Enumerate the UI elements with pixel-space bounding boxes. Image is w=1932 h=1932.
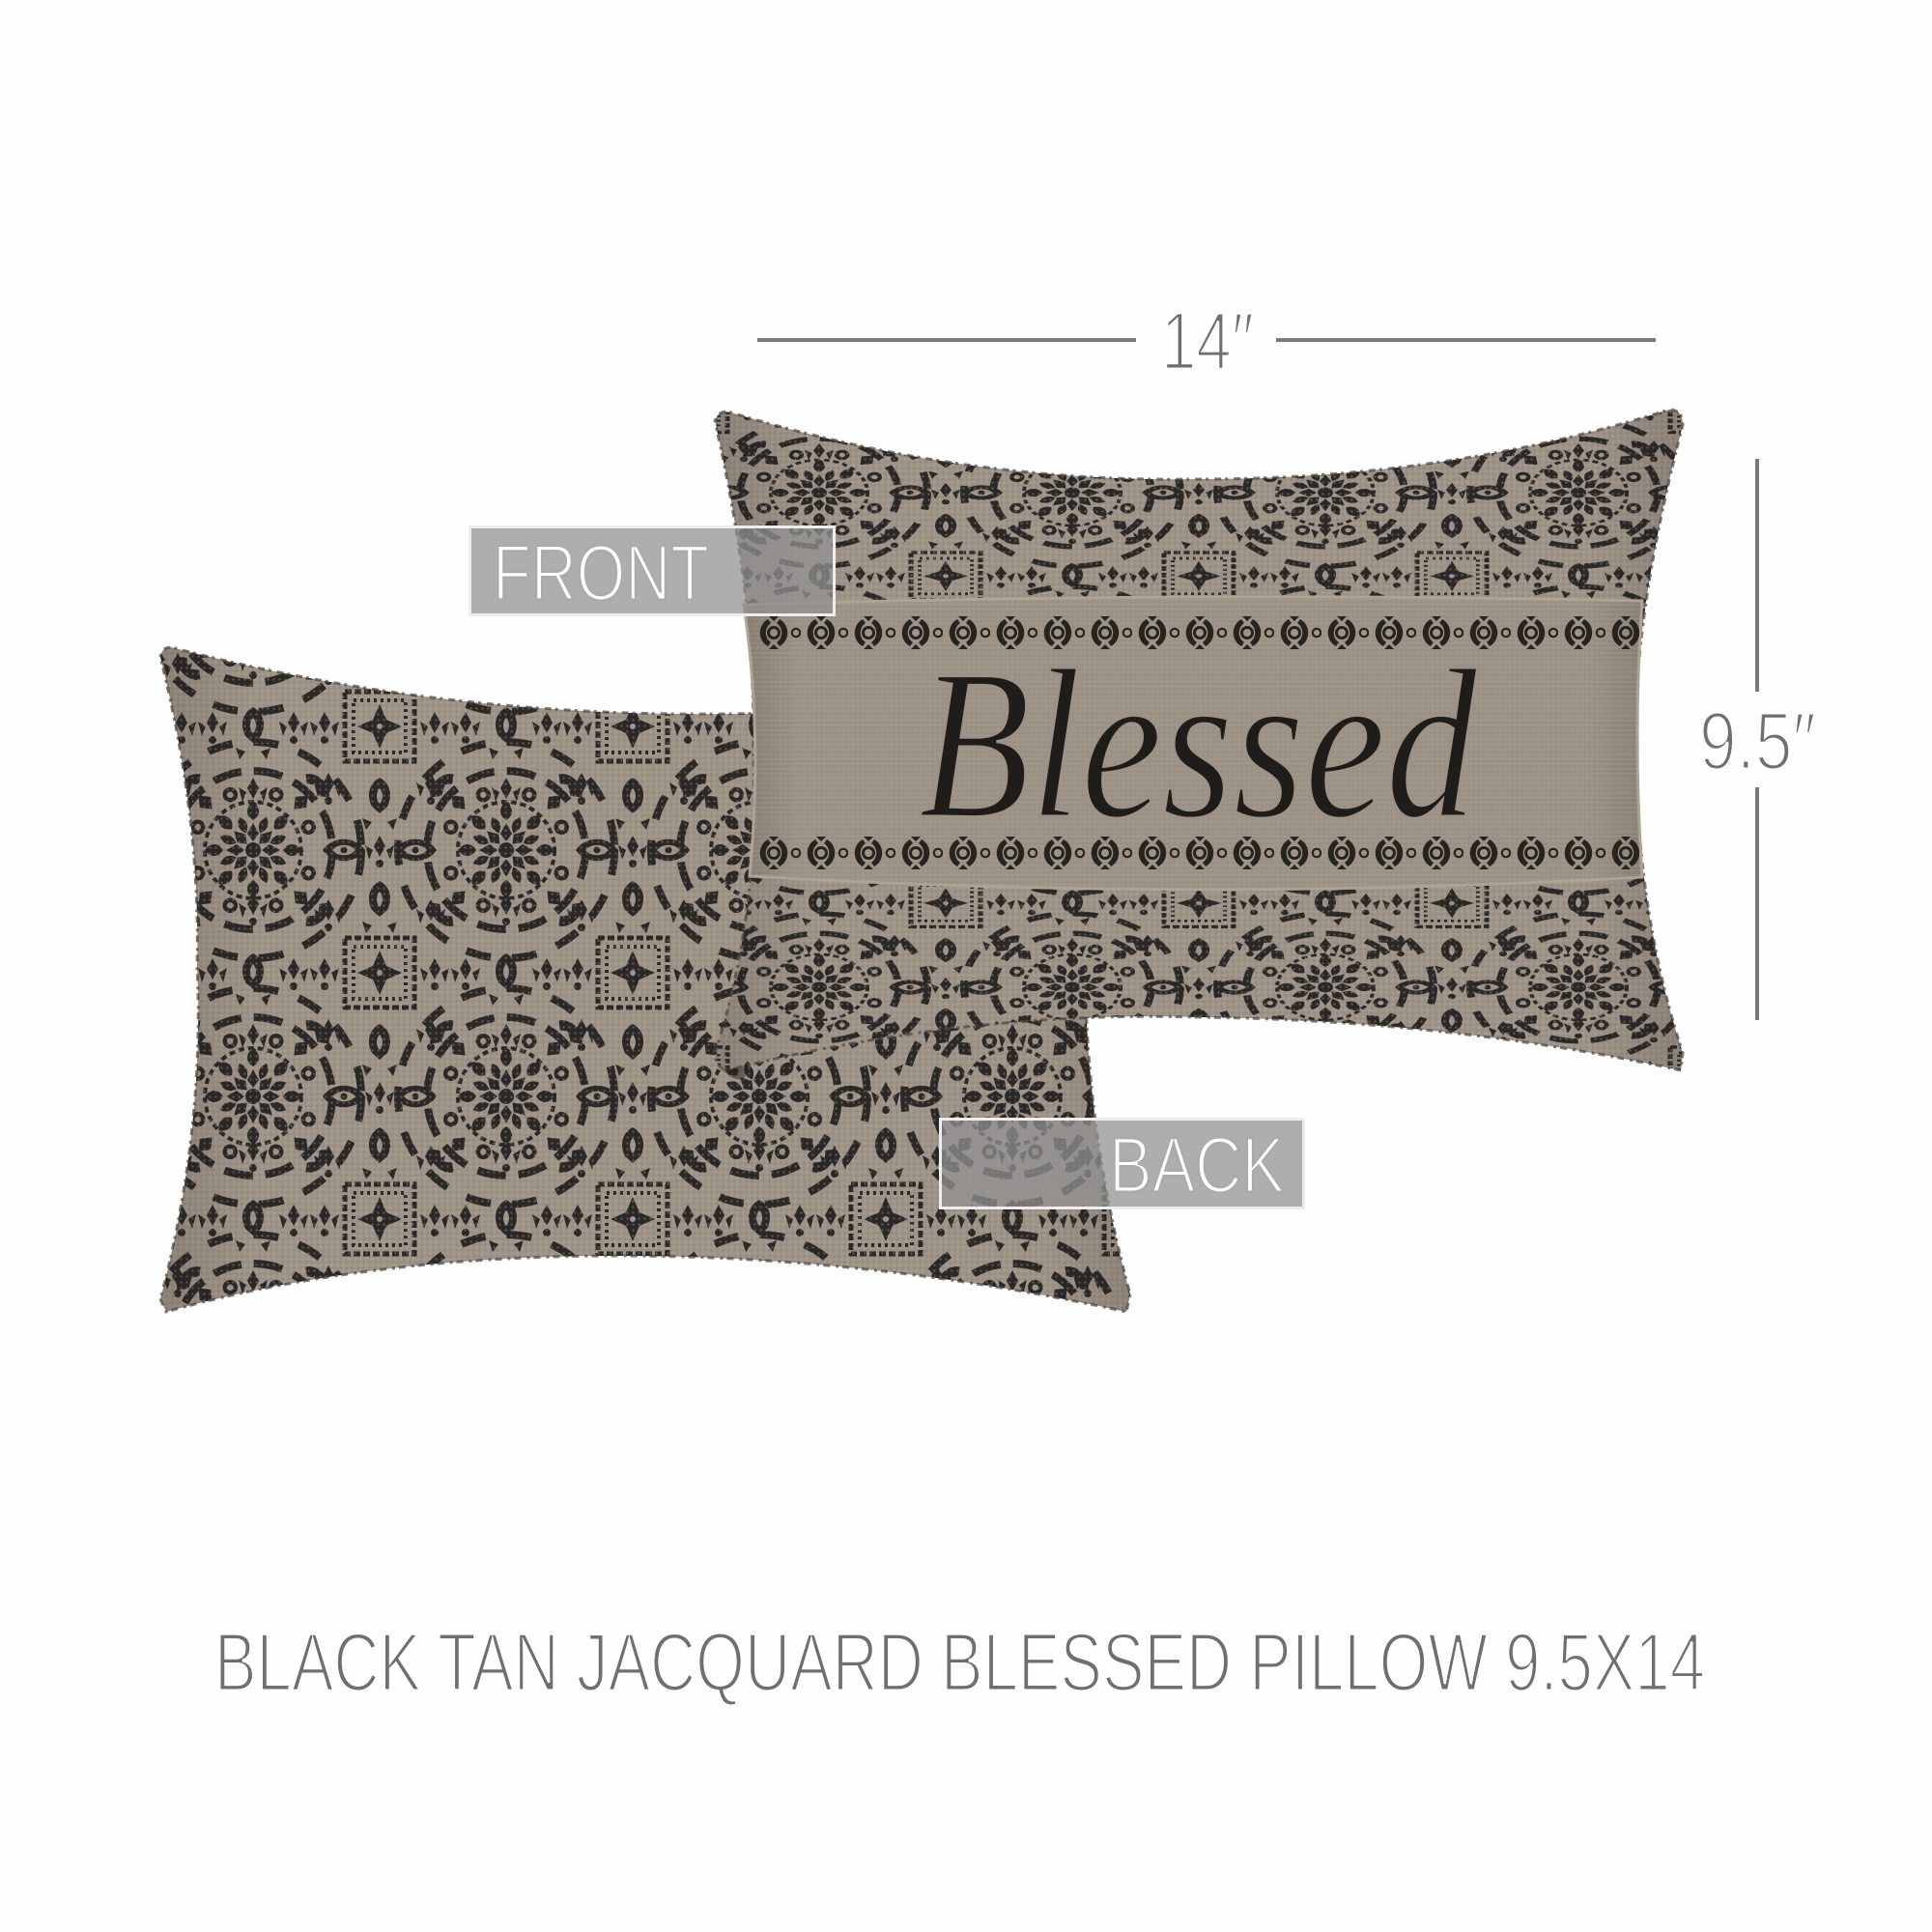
band word: Blessed [919, 626, 1478, 864]
front pillow lower fabric [710, 609, 1688, 1077]
front pillow [710, 406, 1688, 1080]
dimension: height 9.5 in: 9.5″ [1699, 696, 1816, 786]
front pillow upper fabric [710, 406, 1688, 613]
dimension: height 9.5 in [1699, 459, 1816, 1020]
label: BACK: BACK [1109, 1122, 1285, 1209]
band trim: upper [753, 616, 1639, 649]
dimension: width 14 in [757, 296, 1656, 386]
label: FRONT: FRONT [493, 529, 709, 617]
sentiment band [744, 597, 1642, 890]
band trim: lower [753, 837, 1639, 869]
front pillow contact shadow [715, 753, 775, 1080]
back pillow [155, 638, 1140, 1319]
dimension: width 14 in: 14″ [1161, 296, 1254, 386]
label: BACK [941, 1119, 1304, 1209]
